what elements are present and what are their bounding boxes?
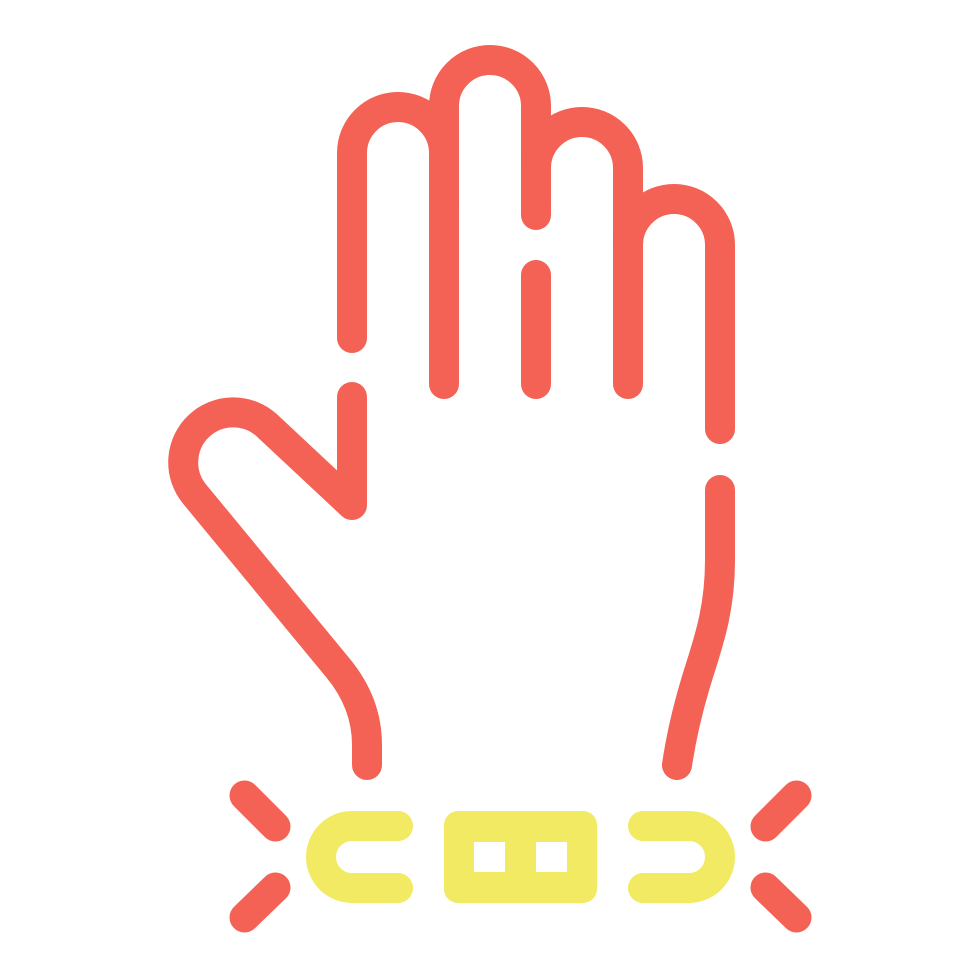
- spark top right: [766, 796, 796, 826]
- third finger: [536, 122, 628, 384]
- right chain link: [643, 826, 720, 888]
- spark bottom left: [244, 888, 276, 918]
- second finger: [444, 60, 536, 384]
- spark top left: [244, 796, 276, 826]
- spark bottom right: [766, 888, 796, 918]
- break sparks: [244, 796, 796, 918]
- thumb and inner palm: [183, 397, 367, 765]
- left chain link: [321, 826, 398, 888]
- first finger: [352, 107, 444, 384]
- middle chain link: [444, 811, 597, 903]
- fourth finger and outer palm: [628, 199, 720, 765]
- hand outline: [183, 60, 720, 765]
- broken chain: [321, 811, 720, 903]
